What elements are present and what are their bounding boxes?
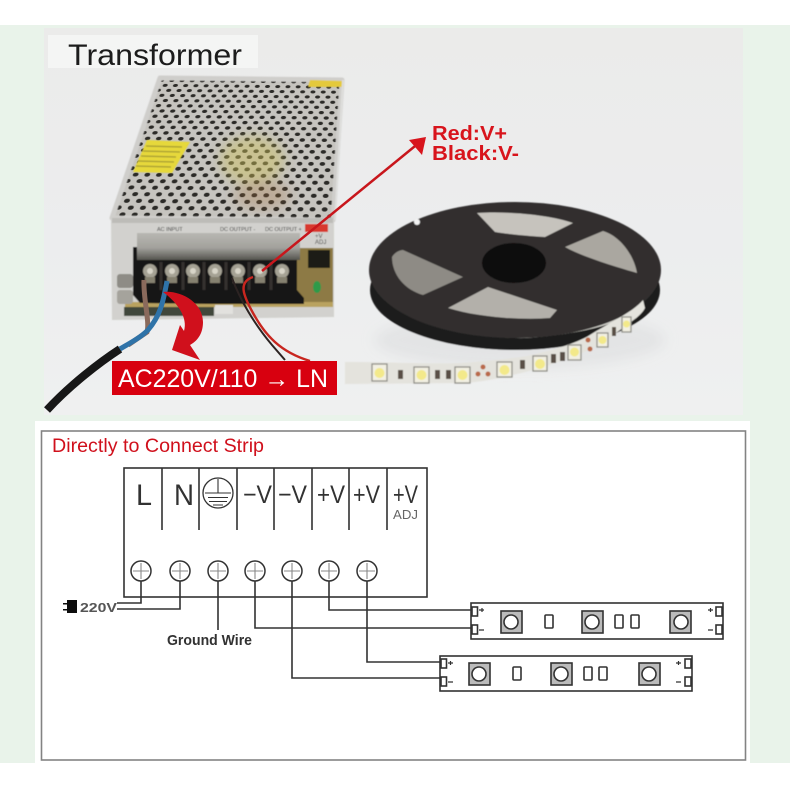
front face labels: AC INPUT <box>157 227 183 233</box>
loose LED strip <box>345 300 645 384</box>
terminal labels: ADJ <box>393 508 418 522</box>
diagram panel background <box>35 421 750 763</box>
terminal labels: +V <box>317 481 345 509</box>
wiring diagram <box>63 468 723 691</box>
strip LED emitters <box>374 320 630 380</box>
reel hole <box>414 219 420 225</box>
terminal cover <box>137 233 300 260</box>
LED strip 2 <box>440 656 692 691</box>
reel hub <box>482 243 546 283</box>
front face <box>111 218 334 320</box>
transformer perforated lid <box>112 78 342 220</box>
red output wire <box>244 277 310 361</box>
transformer power supply <box>111 78 343 320</box>
strip LEDs <box>372 317 631 383</box>
brown live wire <box>128 280 148 345</box>
black power cable <box>47 349 120 410</box>
ground wire <box>217 581 219 630</box>
reel shadow <box>375 312 665 368</box>
front face labels: DC OUTPUT - <box>220 227 256 233</box>
coiled strip rim <box>408 296 645 338</box>
terminal labels: +V <box>393 481 418 509</box>
front face labels: ADJ <box>315 240 326 246</box>
polarity label <box>432 123 519 165</box>
mounting screws <box>117 274 133 304</box>
red arrow to polarity label <box>262 137 426 271</box>
black output wire <box>232 278 285 360</box>
terminal block <box>133 247 304 304</box>
terminal block outline <box>124 468 427 597</box>
front face labels <box>112 218 333 246</box>
photo panel background <box>44 28 743 415</box>
top disc <box>369 202 661 338</box>
terminal labels <box>136 479 418 522</box>
220V label: 220V <box>80 600 117 615</box>
blue neutral wire <box>120 281 167 349</box>
title: Transformer <box>48 35 258 72</box>
polarity label: Black:V- <box>432 143 519 165</box>
title: Transformer: Transformer <box>68 39 242 72</box>
terminal screws <box>131 561 377 581</box>
terminal labels: −V <box>243 481 272 509</box>
lower disc <box>370 230 660 350</box>
LED strip reel <box>345 202 665 384</box>
wiring diagram frame <box>42 431 746 760</box>
AC input label: AC220V/110 → LN <box>118 365 328 393</box>
foot bracket <box>215 305 233 314</box>
terminal labels: −V <box>278 481 307 509</box>
circuit board <box>295 248 333 304</box>
output wires <box>255 581 472 678</box>
plug icon <box>63 600 77 613</box>
polarity label: Red:V+ <box>432 123 507 145</box>
terminal labels: N <box>174 479 194 512</box>
lid highlights and labels <box>112 78 343 220</box>
terminal screws <box>143 262 289 290</box>
LED strip 1 <box>471 603 723 639</box>
terminal labels: +V <box>353 481 380 509</box>
front face labels: +V <box>315 234 323 240</box>
front face labels: DC OUTPUT + <box>265 227 302 233</box>
strip resistors and pads <box>398 327 616 379</box>
diagram heading: Directly to Connect Strip <box>52 436 264 457</box>
terminal labels: L <box>136 479 152 512</box>
green LED <box>313 281 321 293</box>
curved red arrow to AC label <box>163 292 203 360</box>
icon: earth symbol <box>203 478 233 508</box>
mains wires <box>117 581 180 609</box>
reel windows <box>392 212 637 319</box>
ground wire label: Ground Wire <box>167 632 252 649</box>
